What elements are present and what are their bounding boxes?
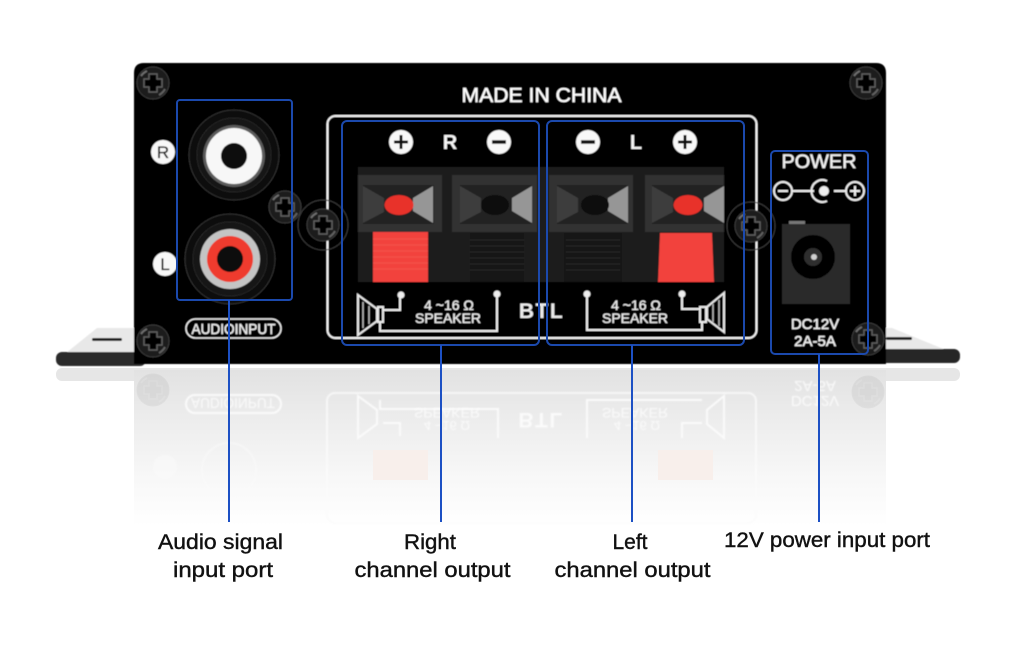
blue leader lines [229,300,819,522]
RCA jack: left red [185,214,275,304]
terminal 2: right - [452,175,537,282]
BTL label: BTL [519,300,564,323]
label: left channel output: channel output [554,559,711,582]
input R/L labels: L [160,255,170,274]
speaker section outline [328,116,756,338]
speaker diagram right [358,290,500,335]
polarity symbols right channel [389,130,511,154]
terminal 4: left + [645,175,724,282]
speaker terminal block [358,167,724,282]
reflection of the amplifier: 2A-5A [794,377,836,394]
DC power jack [782,221,850,304]
mounting bracket left [56,328,146,366]
reflection of the amplifier: 4 ~16 Ω [424,418,470,433]
audio input label: AUDIOINPUT [192,321,276,338]
power heading: POWER [782,152,856,173]
reflection of the amplifier: SPEAKER [602,405,668,421]
label: right channel output: channel output [354,559,511,582]
speaker diagram left [584,290,724,332]
label: left channel output [554,531,711,582]
DC rating text [791,316,839,350]
polarity symbols left channel [576,130,697,154]
DC rating text: DC12V [791,316,839,333]
amplifier body [56,63,960,366]
DC rating text: 2A-5A [794,333,836,350]
reflection of the amplifier: BTL [518,408,564,431]
reflection of the amplifier: SPEAKER [414,405,480,421]
screws [137,67,884,357]
power polarity symbol [774,180,864,202]
label: right channel output: Right [404,531,456,554]
blue callout boxes [177,100,868,354]
label: 12V power input port: 12V power input port [724,529,930,552]
reflection of the amplifier: 4 ~16 Ω [614,418,660,433]
speaker diagram right: SPEAKER [415,310,481,326]
polarity symbols right channel: R [443,132,458,154]
speaker diagram left: 4 ~16 Ω [611,297,661,313]
reflection of the amplifier [56,368,960,526]
input R/L labels [151,140,177,276]
reflection of the amplifier: AUDIOINPUT [191,394,275,411]
made in china heading: MADE IN CHINA [462,85,622,107]
input R/L labels: R [157,143,169,162]
reflection of the amplifier: DC12V [791,392,839,409]
mounting bracket right [870,328,960,363]
label: audio signal input port [158,531,283,582]
terminal 1: right + [358,175,442,282]
label: audio signal input port: input port [173,559,273,582]
label: left channel output: Left [612,531,648,554]
chassis [134,63,886,364]
terminal 3: left - [549,175,633,282]
label: right channel output [354,531,511,582]
label: audio signal input port: Audio signal [158,531,283,554]
speaker diagram left: SPEAKER [602,310,668,326]
speaker diagram right: 4 ~16 Ω [424,297,474,313]
RCA jack: right white [189,110,279,200]
polarity symbols left channel: L [630,132,642,154]
